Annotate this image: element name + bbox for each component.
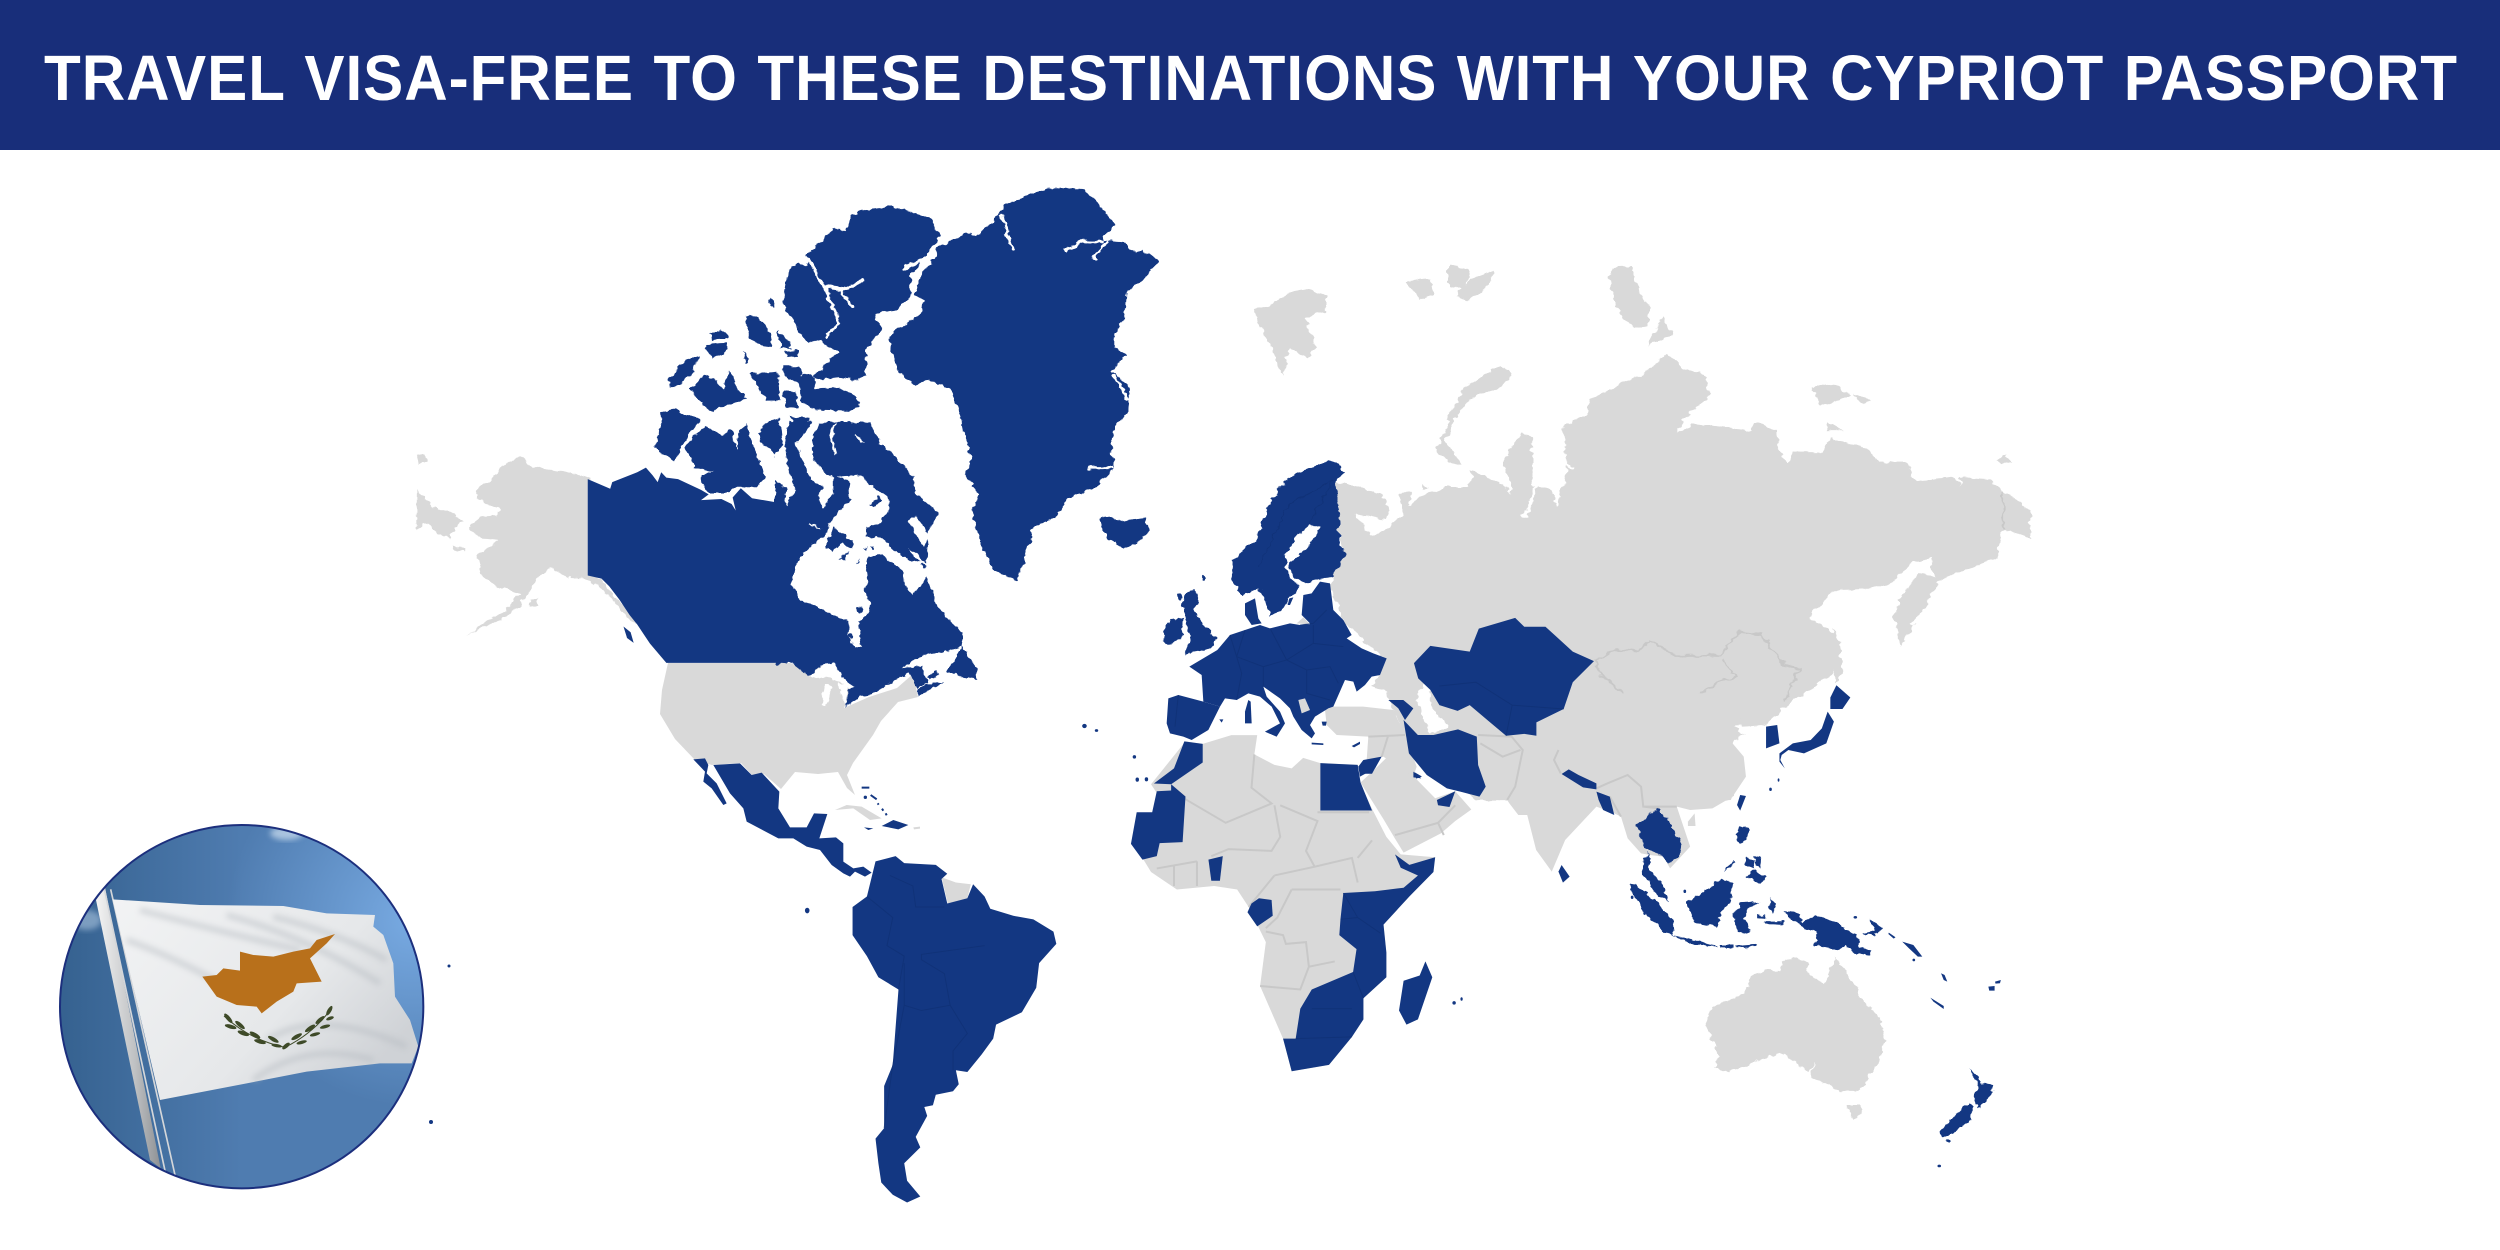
canadian arctic islands blue — [655, 207, 939, 493]
southeast asia blue — [1628, 808, 1883, 956]
canada east, baffin and hudson bay — [775, 418, 977, 707]
central asia blue — [1414, 618, 1594, 736]
south america blue — [805, 856, 1056, 1202]
olive branches — [223, 1005, 334, 1051]
sky background — [57, 820, 427, 1193]
flag pole — [96, 887, 175, 1175]
greenland blue — [887, 188, 1159, 581]
world map — [417, 188, 2030, 1202]
scandinavia blue — [1232, 460, 1345, 616]
stray island dots — [429, 964, 450, 1124]
new zealand blue — [1941, 1068, 1994, 1143]
africa blue destinations — [1082, 724, 1463, 1071]
great lakes — [808, 665, 848, 687]
mexico, central america and caribbean — [693, 758, 920, 877]
ellesmere island — [783, 207, 939, 380]
southeast asia and oceania — [1628, 778, 2001, 1167]
title: TRAVEL VISA-FREE TO THESE DESTINATIONS WITH YOUR CYPRIOT PASSPORT — [44, 43, 2457, 114]
australia grey — [1706, 957, 1884, 1121]
header banner — [0, 0, 2500, 150]
china, india and southeast asia grey — [1467, 693, 1762, 872]
middle and south asia blue — [1404, 720, 1614, 883]
hudson bay and foxe basin — [792, 475, 937, 647]
central and south america — [693, 758, 1056, 1202]
united states grey — [660, 663, 918, 795]
uk and ireland blue — [1163, 575, 1217, 655]
north america and greenland — [417, 188, 1159, 795]
canada west blue — [588, 468, 785, 663]
white flag cloth — [113, 899, 418, 1100]
turkey and levant grey — [1325, 707, 1417, 777]
south korea and japan blue — [1737, 685, 1850, 811]
continental europe blue — [1167, 582, 1413, 777]
cyprus flag medallion — [57, 820, 427, 1193]
africa grey — [1142, 735, 1435, 1071]
russia and north asia grey — [1330, 353, 2030, 800]
cyprus island emblem — [202, 934, 335, 1013]
iceland blue — [1102, 515, 1150, 549]
eurasia — [1163, 265, 2030, 883]
alaska and chukotka grey — [417, 454, 636, 636]
gulf of boothia — [795, 418, 833, 508]
pacific islands blue — [1631, 778, 2001, 1167]
africa — [1082, 724, 1471, 1071]
gulf of st lawrence islands — [825, 527, 855, 551]
arctic islands and kamchatka grey — [1256, 265, 2012, 682]
arabian peninsula grey — [1361, 758, 1471, 853]
